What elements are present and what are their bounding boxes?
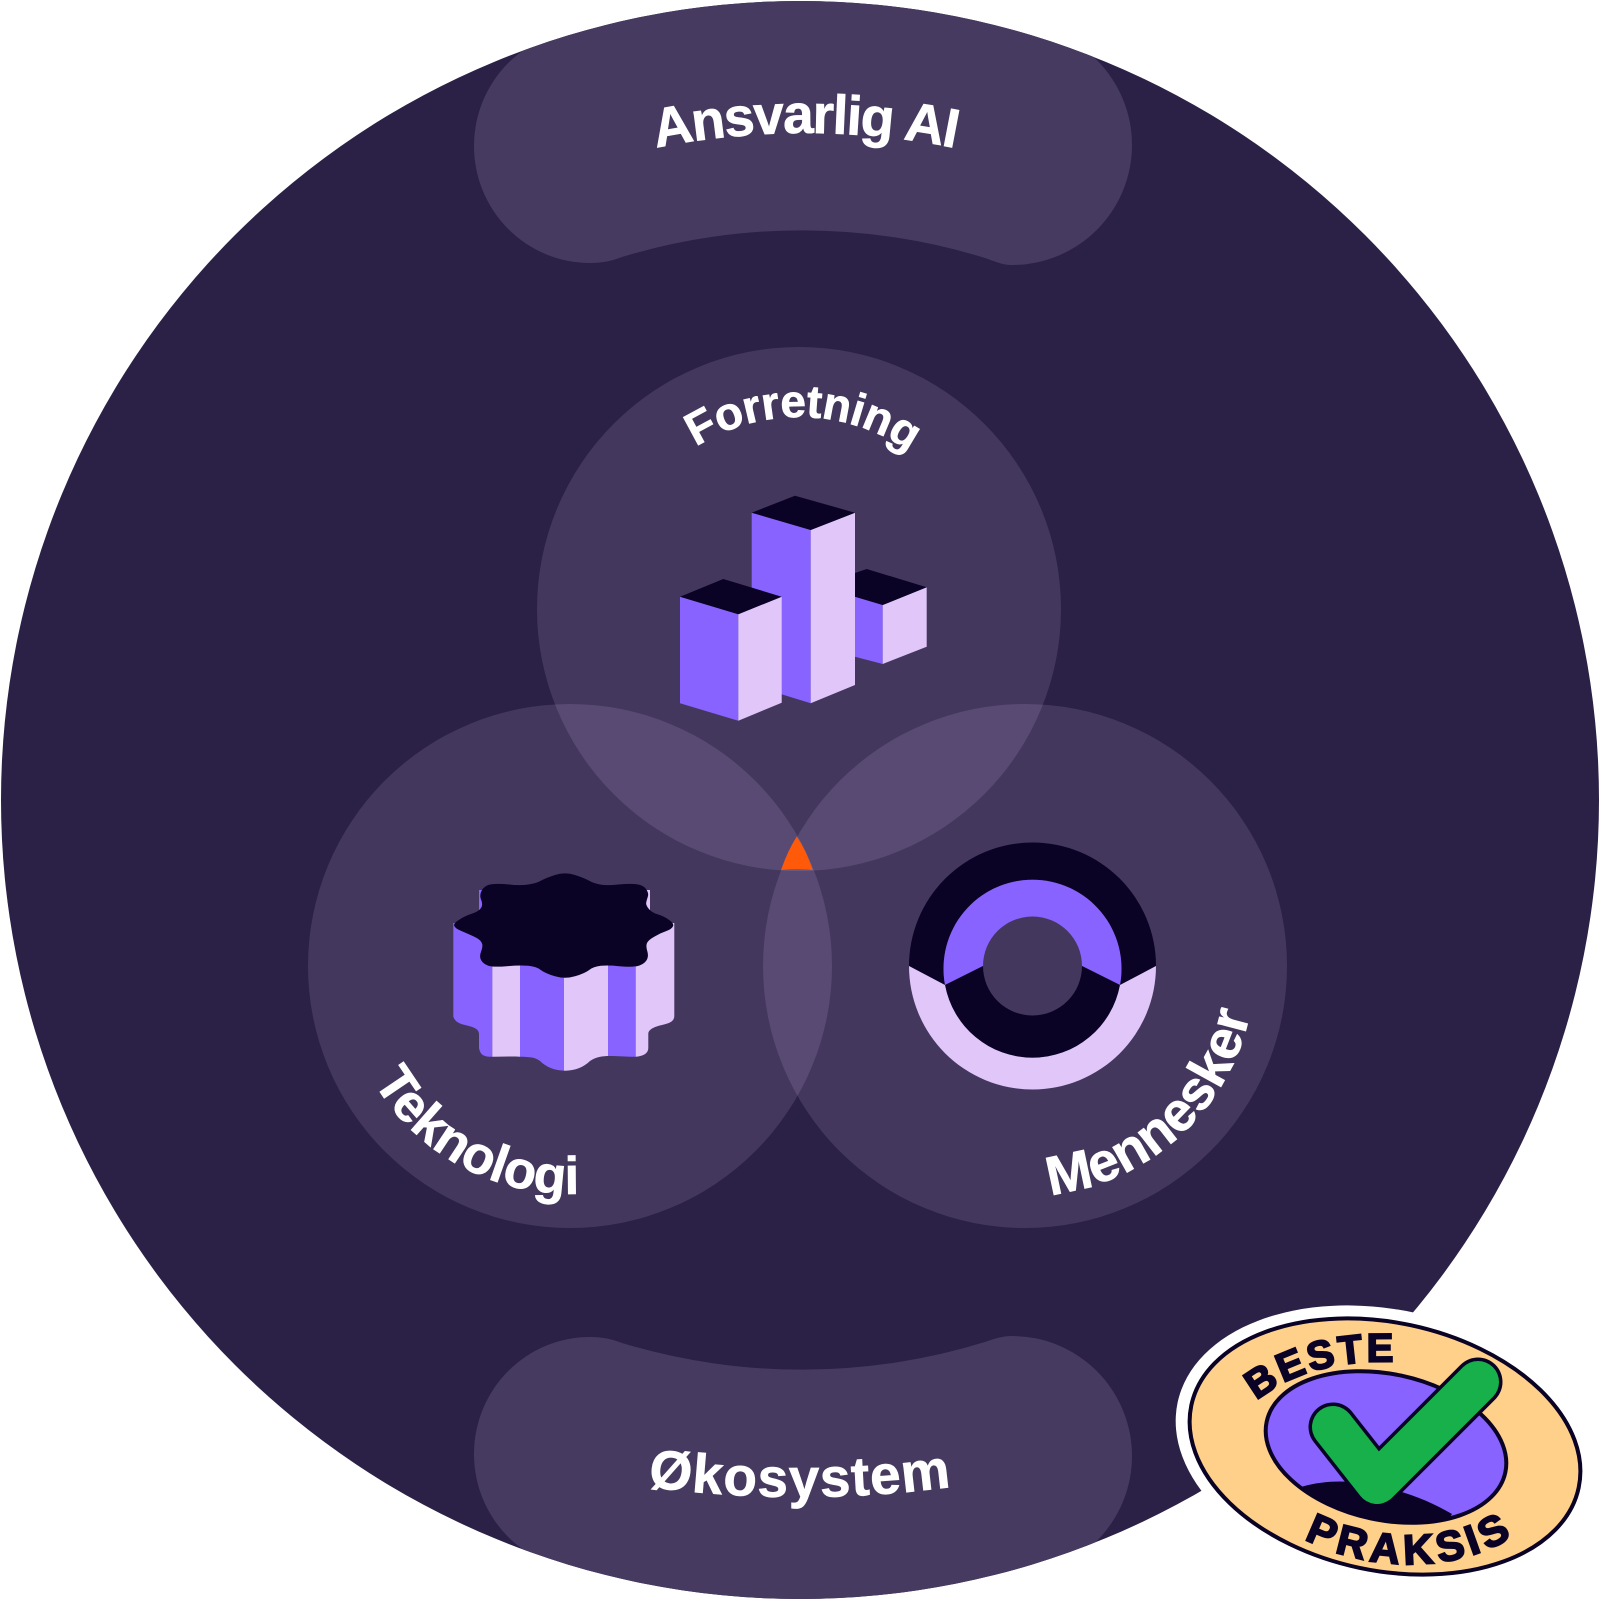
icon: gear: [453, 873, 676, 1080]
heading: Ansvarlig AI: Ansvarlig AI: [656, 94, 960, 148]
panel: Økosystem: [474, 1336, 1132, 1599]
label: Forretning: Forretning: [682, 387, 920, 455]
icon: check mark: [1333, 1382, 1478, 1483]
circle: Forretning: [537, 347, 1061, 871]
icon: buildings: [680, 496, 927, 721]
badge: Beste Praksis: [1176, 1305, 1582, 1577]
label: BESTE: BESTE: [1242, 1333, 1393, 1400]
panel: Ansvarlig AI: [474, 1, 1132, 265]
circle: Mennesker: [763, 704, 1287, 1228]
label: Mennesker: Mennesker: [1046, 1007, 1248, 1196]
centre triangle: [781, 836, 813, 870]
circle: Teknologi: [308, 704, 832, 1228]
label: Teknologi: Teknologi: [380, 1061, 576, 1205]
heading: Økosystem: Økosystem: [650, 1450, 948, 1509]
label: PRAKSIS: PRAKSIS: [1305, 1512, 1509, 1566]
icon: ring: [909, 843, 1156, 1090]
